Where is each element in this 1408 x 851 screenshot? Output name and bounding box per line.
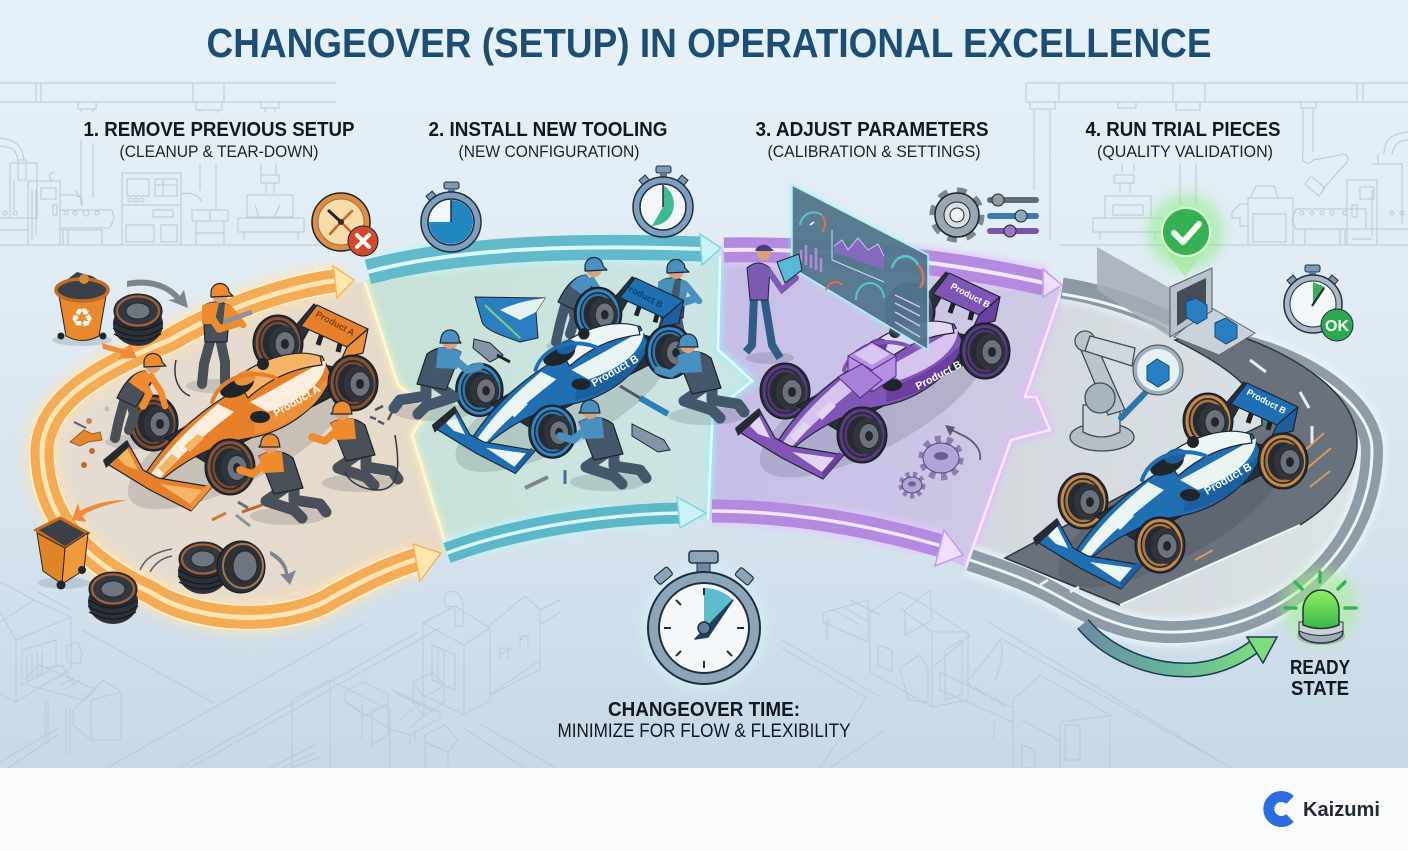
- zone 2: install new tooling: [365, 249, 752, 552]
- road: [1005, 328, 1357, 605]
- purple flow bands: [712, 250, 1044, 547]
- workers: blue crew behind car: [546, 257, 699, 369]
- step 1 heading: 1. REMOVE PREVIOUS SETUP: [84, 118, 354, 141]
- arrow: grey tire arrow top: [127, 279, 188, 308]
- orange flow band: [42, 280, 425, 617]
- ready state label: STATE: [1291, 678, 1349, 700]
- factory line art: top right: [1026, 83, 1408, 245]
- debris and tools: [70, 406, 392, 526]
- icon: stopwatch OK: [1284, 265, 1353, 341]
- step 2 heading: (NEW CONFIGURATION): [458, 142, 640, 161]
- step 3 heading: 3. ADJUST PARAMETERS: [756, 118, 988, 141]
- icon: recycling bin: ♻: [70, 304, 94, 334]
- Kaizumi wordmark: Kaizumi: [1303, 799, 1380, 821]
- icon: tire bottom left: [88, 572, 138, 624]
- arrow: orange out of track: [72, 500, 127, 522]
- hologram dashboard: [790, 183, 928, 352]
- teal flow bands: [368, 247, 702, 553]
- factory line art: top left: [0, 83, 350, 245]
- icon: settings gear and sliders: [933, 191, 1036, 239]
- car: purple with open engine: Product B: [949, 281, 992, 310]
- worker: orange standing crew behind car: [186, 283, 252, 393]
- factory line art: bottom right: [782, 590, 1230, 768]
- arrow: orange top: [333, 266, 354, 298]
- arrow: purple top: [1043, 269, 1062, 297]
- step 2 heading: 2. INSTALL NEW TOOLING: [428, 118, 668, 141]
- arrow: teal bottom: [677, 497, 706, 528]
- icon: Kaizumi logo mark: [1269, 797, 1290, 821]
- arrow: purple bottom: [935, 530, 963, 566]
- workers: blue crew in front: [394, 330, 744, 491]
- zone 3: adjust parameters: [708, 250, 1062, 567]
- title: CHANGEOVER (SETUP) IN OPERATIONAL EXCELLENCE: [206, 20, 1212, 66]
- changeover time caption: CHANGEOVER TIME:: [608, 699, 800, 721]
- icon: ready beacon: [1282, 569, 1358, 645]
- spare parts: new tooling: [473, 297, 670, 488]
- icon: tire pile: [140, 541, 296, 594]
- icon: stopwatch OK: OK: [1325, 318, 1349, 335]
- icon: waste tire top: [113, 294, 163, 346]
- car: blue product B running: [1033, 382, 1331, 614]
- changeover time caption: [558, 699, 851, 742]
- icon: clock with cross: [312, 193, 378, 256]
- inspection tunnel and conveyor: [1097, 247, 1255, 355]
- floor gears: [901, 425, 980, 496]
- step 4 heading: [1086, 118, 1280, 161]
- icon: stopwatch three quarters: [421, 182, 481, 252]
- icon: green check pin: [1148, 194, 1224, 277]
- car: orange product A: Product A: [314, 309, 357, 338]
- step 3 heading: [756, 118, 988, 161]
- zone 4: run trial pieces: [966, 290, 1372, 631]
- icon: stopwatch green: [633, 166, 693, 237]
- ready state label: [1290, 657, 1351, 700]
- car: blue product B installing: [432, 277, 693, 497]
- icon: recycling bin: [52, 272, 112, 346]
- car: purple with open engine: [735, 272, 1010, 504]
- car: blue product B running: Product B: [1245, 387, 1288, 416]
- footer strip: [0, 768, 1408, 851]
- step 3 heading: (CALIBRATION & SETTINGS): [768, 142, 980, 161]
- car: blue product B installing: Product B: [622, 281, 665, 310]
- arrow: orange into track: [102, 343, 137, 359]
- arrow: orange bottom: [413, 544, 441, 581]
- robot arm with magnifier: [1070, 331, 1183, 451]
- grey track ribbons: [970, 288, 1372, 632]
- ready state label: READY: [1290, 657, 1351, 679]
- step 2 heading: [428, 118, 668, 161]
- zone divider glow lines: [365, 256, 1061, 567]
- step 4 heading: (QUALITY VALIDATION): [1097, 142, 1273, 161]
- car: purple with open engine: Product B: [914, 358, 964, 393]
- car: blue product B running: Product B: [1202, 461, 1254, 498]
- step 4 heading: 4. RUN TRIAL PIECES: [1086, 118, 1280, 141]
- workers: orange crew in front: [105, 353, 398, 525]
- green exit arrow: [1083, 624, 1277, 670]
- worker: operator with tablet: [746, 245, 802, 364]
- step 1 heading: [84, 118, 354, 161]
- car: orange product A: Product A: [272, 383, 323, 420]
- main stopwatch: [642, 551, 766, 690]
- car: blue product B installing: Product B: [590, 353, 641, 390]
- factory line art: bottom left: [0, 582, 560, 768]
- changeover time caption: MINIMIZE FOR FLOW & FLEXIBILITY: [558, 721, 851, 742]
- car: orange product A: [103, 304, 378, 536]
- zone 1: remove previous setup: [42, 282, 450, 616]
- arrow: teal top: [700, 234, 721, 265]
- icon: waste bin lower: [36, 518, 90, 590]
- step 1 heading: (CLEANUP & TEAR-DOWN): [120, 142, 318, 161]
